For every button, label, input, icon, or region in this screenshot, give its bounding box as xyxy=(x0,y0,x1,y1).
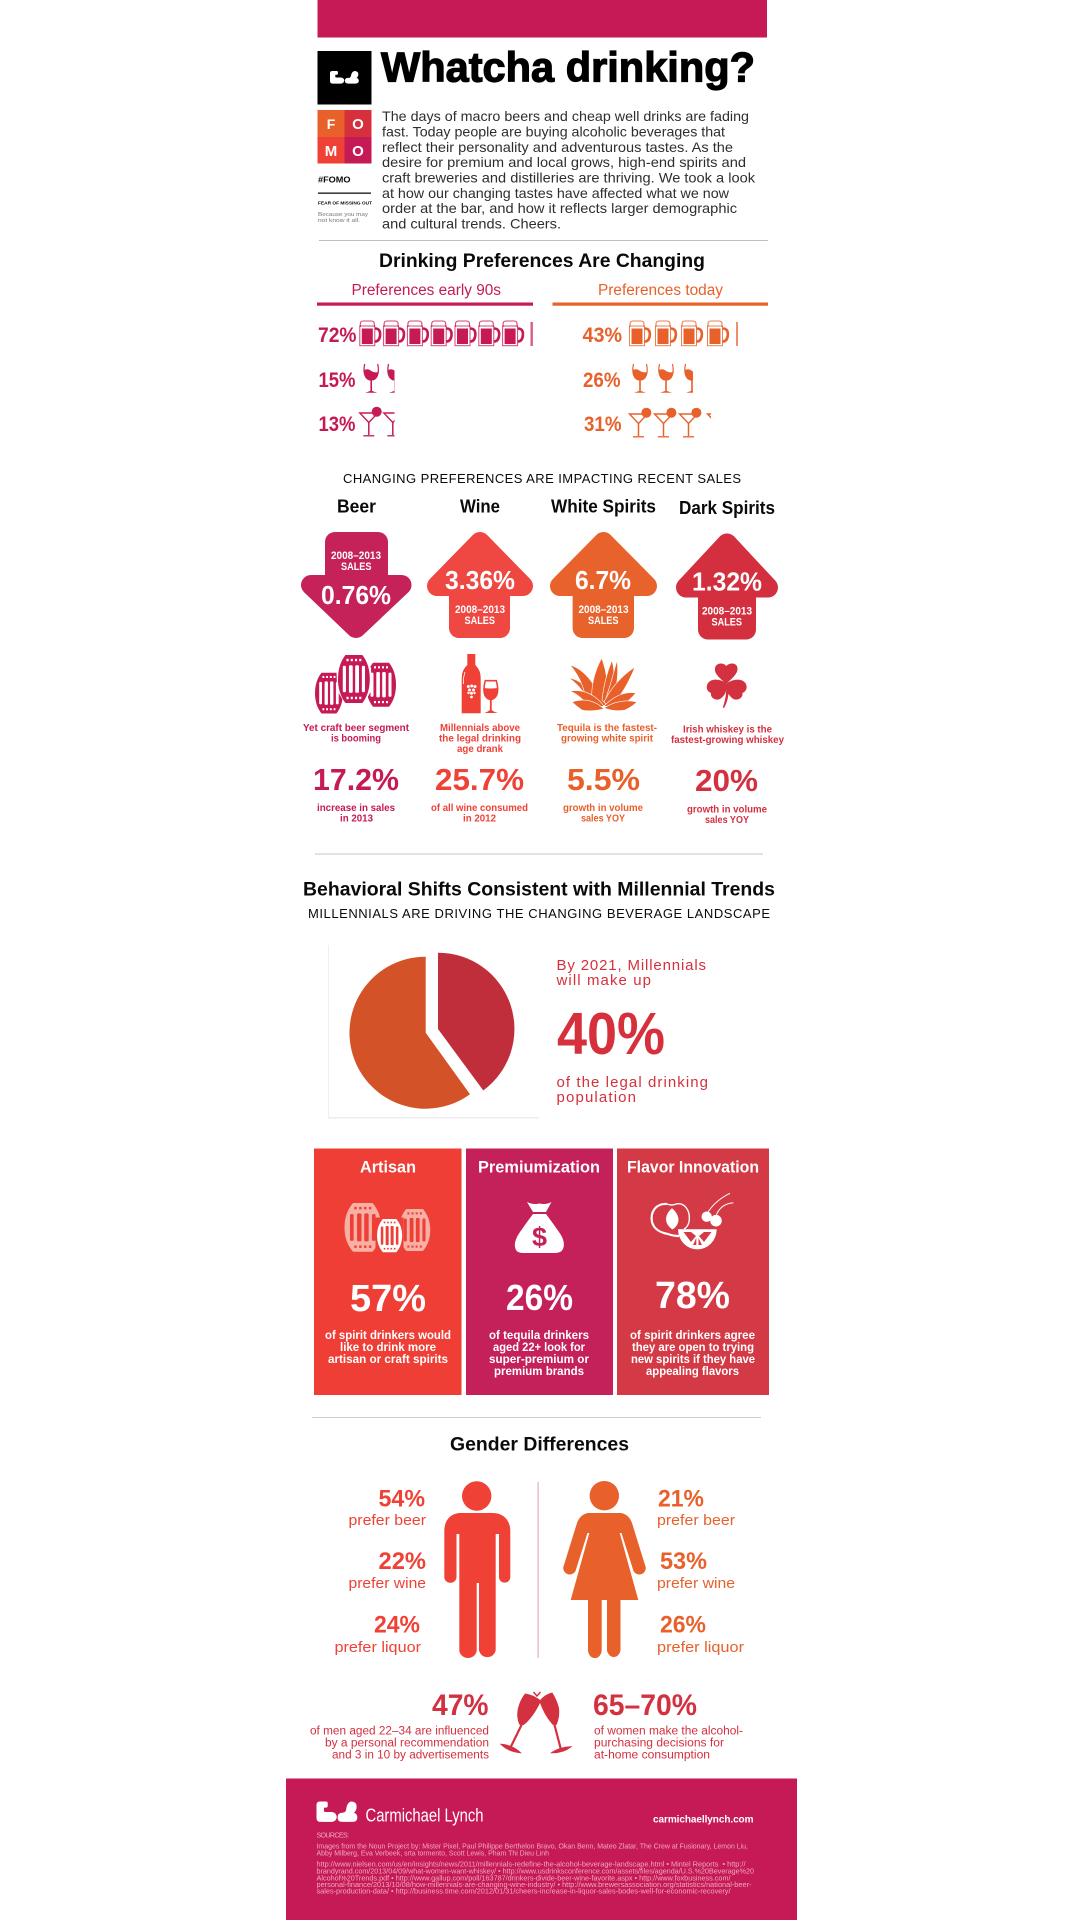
panel: artisan: artisan or craft spirits xyxy=(328,1352,448,1366)
panel: artisan xyxy=(314,1148,462,1395)
arrow: dark spirits up: SALES xyxy=(712,616,742,628)
stat label: increase in sales xyxy=(317,802,395,814)
panel: preferences early 90s: 13% xyxy=(318,413,356,436)
intro text: craft breweries and distilleries are thriving. We took a look xyxy=(382,170,756,186)
icon: money bag: $ xyxy=(532,1222,547,1252)
panel: flavor innovation: they are open to trying xyxy=(632,1340,754,1354)
arrow: beer down: SALES xyxy=(341,561,372,573)
arrow: beer down xyxy=(311,542,402,628)
arrow: dark spirits up: 2008–2013 xyxy=(702,606,752,618)
pie callout: will make up xyxy=(556,972,651,989)
FOMO caption xyxy=(318,176,372,224)
women stats: 21% xyxy=(658,1486,704,1512)
caption: Millennials above xyxy=(440,722,520,734)
women stats: prefer beer xyxy=(657,1512,735,1529)
footer xyxy=(286,1778,797,1920)
panel: preferences early 90s xyxy=(317,282,533,436)
intro text: fast. Today people are buying alcoholic beverages that xyxy=(382,124,725,140)
FOMO block: M xyxy=(325,143,337,160)
FOMO block: O xyxy=(352,143,364,160)
arrow: wine up: SALES xyxy=(464,615,495,627)
caption xyxy=(303,722,409,744)
stat label: sales YOY xyxy=(705,814,749,826)
FOMO caption: not know it all. xyxy=(318,218,360,224)
logo: Carmichael Lynch xyxy=(316,1802,484,1826)
callout: men influenced: by a personal recommendation xyxy=(325,1737,489,1749)
panel: premiumization: super-premium or xyxy=(489,1352,589,1366)
caption: Tequila is the fastest- xyxy=(557,722,657,734)
arrow: white spirits up: 6.7% xyxy=(575,565,631,595)
panel: premiumization: premium brands xyxy=(494,1364,584,1378)
panel: preferences today: 26% xyxy=(583,369,621,392)
icon: money bag xyxy=(515,1202,564,1253)
women stats: 53% xyxy=(660,1548,707,1575)
pie callout: of the legal drinking xyxy=(556,1074,708,1091)
caption: the legal drinking xyxy=(439,732,521,744)
pie callout: By 2021, Millennials xyxy=(556,957,706,974)
icon: wine bottle and glass xyxy=(462,654,498,713)
caption: is booming xyxy=(331,732,381,744)
sources: Alcohol%20Trends.pdf • http://www.gallup.com/poll/163787/drinkers-divide-beer-wine-favorite.aspx • http://www.foxbusiness.com/ xyxy=(316,1876,731,1882)
icon: agave xyxy=(569,658,637,711)
panel: preferences early 90s: Preferences early 90s xyxy=(352,282,501,299)
caption: growing white spirit xyxy=(561,732,653,744)
column: white spirits: White Spirits xyxy=(551,496,656,516)
panel: premiumization: 26% xyxy=(506,1277,573,1318)
subheading: recent sales: CHANGING PREFERENCES ARE IMPACTING RECENT SALES xyxy=(343,471,741,486)
panel: flavor innovation xyxy=(617,1148,769,1395)
men stats: 24% xyxy=(374,1612,420,1638)
panel: flavor innovation: appealing flavors xyxy=(646,1364,739,1378)
logo: black square xyxy=(318,51,372,104)
FOMO caption: Because you may xyxy=(318,212,368,218)
callout: men influenced: and 3 in 10 by advertisements xyxy=(332,1749,489,1761)
callout: men influenced: 47% xyxy=(432,1689,488,1722)
stat: 17.2% xyxy=(313,762,399,797)
icon: barrels xyxy=(344,1203,430,1254)
arrow: wine up: 2008–2013 xyxy=(455,604,505,616)
caption xyxy=(439,722,521,755)
arrow: wine up xyxy=(437,542,523,628)
pie callout: 40% xyxy=(557,1001,665,1067)
pie callout xyxy=(556,957,708,1106)
intro text: The days of macro beers and cheap well drinks are fading xyxy=(382,108,749,124)
intro text: reflect their personality and adventurous tastes. As the xyxy=(382,139,733,155)
panel: premiumization: Premiumization xyxy=(478,1158,600,1176)
stat label: of all wine consumed xyxy=(431,802,528,814)
caption: Irish whiskey is the xyxy=(683,724,772,736)
stat: 25.7% xyxy=(435,762,524,797)
sources xyxy=(316,1833,754,1896)
subheading: millennials: MILLENNIALS ARE DRIVING THE CHANGING BEVERAGE LANDSCAPE xyxy=(308,906,770,921)
column: wine xyxy=(431,496,528,824)
FOMO block xyxy=(318,110,372,164)
panel: premiumization: aged 22+ look for xyxy=(493,1340,585,1354)
caption: Yet craft beer segment xyxy=(303,722,409,734)
panel: flavor innovation: new spirits if they have xyxy=(631,1352,755,1366)
callout: women purchasing xyxy=(593,1689,743,1761)
women stats: prefer liquor xyxy=(657,1639,744,1656)
sources: brandyrand.com/2013/04/09/what-women-want-whiskey/ • http://www.usdrinksconference.com/assets/files/agenda/U.S.%20Beverage%20 xyxy=(316,1869,754,1876)
icon: man xyxy=(444,1481,510,1658)
stat label xyxy=(317,802,395,824)
stat: 5.5% xyxy=(567,762,640,797)
panel: artisan: Artisan xyxy=(360,1158,416,1176)
stat label: growth in volume xyxy=(687,804,767,816)
men stats: 22% xyxy=(378,1548,426,1575)
heading: gender differences: Gender Differences xyxy=(450,1434,629,1456)
stat label: in 2013 xyxy=(340,812,373,824)
sources: personal-finance/2013/10/08/how-millennials-are-changing-wine-industry/ • http://www.brewersassociation.org/statistics/national-beer- xyxy=(316,1882,752,1889)
top bar xyxy=(318,0,767,38)
intro text xyxy=(382,108,756,232)
panel: artisan: of spirit drinkers would xyxy=(325,1328,451,1342)
sources: http://www.nielsen.com/us/en/insights/news/2011/millennials-redefine-the-alcohol-beverage-landscape.html • Mintel Reports • http:// xyxy=(316,1862,746,1869)
FOMO block: O xyxy=(352,116,364,133)
men stats: prefer liquor xyxy=(334,1639,421,1656)
pie callout: population xyxy=(556,1089,636,1106)
sources: SOURCES: xyxy=(316,1833,349,1840)
stat label: in 2012 xyxy=(463,812,496,824)
logo: Carmichael Lynch: Carmichael Lynch xyxy=(366,1806,484,1826)
intro text: desire for premium and local grows, high-end spirits and xyxy=(382,154,746,170)
panel: preferences today xyxy=(552,282,768,437)
callout: women purchasing: of women make the alcohol- xyxy=(594,1725,743,1737)
FOMO block: F xyxy=(327,116,336,132)
intro text: and cultural trends. Cheers. xyxy=(382,216,561,232)
panel: artisan: 57% xyxy=(350,1278,426,1320)
callout: men influenced xyxy=(310,1689,489,1761)
caption: fastest-growing whiskey xyxy=(671,734,784,746)
men stats xyxy=(334,1486,426,1656)
panel: preferences today: 31% xyxy=(584,413,622,436)
callout: women purchasing: purchasing decisions for xyxy=(594,1737,724,1749)
stat label: sales YOY xyxy=(581,812,625,824)
FOMO caption: #FOMO xyxy=(318,176,350,184)
women stats: prefer wine xyxy=(657,1575,735,1592)
heading: drinking preferences: Drinking Preferences Are Changing xyxy=(379,250,705,272)
arrow: white spirits up: SALES xyxy=(588,615,618,627)
caption xyxy=(557,722,657,744)
heading: behavioral shifts: Behavioral Shifts Consistent with Millennial Trends xyxy=(303,878,775,900)
arrow: white spirits up: 2008–2013 xyxy=(578,604,628,616)
callout: women purchasing: at-home consumption xyxy=(594,1749,710,1761)
panel: flavor innovation: 78% xyxy=(655,1275,730,1317)
sources: Images from the Noun Project by: Mister Pixel, Paul Philippe Berthelon Bravo, Okan Benn, Mateo Zlatar, The Crew at Fusionary, Lemon Liu, xyxy=(316,1843,748,1850)
men stats: 54% xyxy=(378,1486,425,1512)
stat label xyxy=(687,804,767,826)
panel: flavor innovation: of spirit drinkers agree xyxy=(630,1328,755,1342)
women stats: 26% xyxy=(660,1612,706,1638)
FOMO caption: FEAR OF MISSING OUT xyxy=(318,200,372,206)
icon: woman xyxy=(563,1481,646,1658)
stat label: growth in volume xyxy=(563,802,643,814)
sources: Abby Milberg, Eva Verbeek, srta tormento, Scott Lewis, Pham Thi Dieu Linh xyxy=(316,1850,549,1857)
men stats: prefer beer xyxy=(348,1512,426,1529)
caption xyxy=(671,724,784,746)
column: beer xyxy=(303,496,409,824)
stat label xyxy=(431,802,528,824)
website: carmichaellynch.com xyxy=(653,1814,754,1826)
column: white spirits xyxy=(551,496,657,824)
pie chart xyxy=(328,945,539,1118)
panel: flavor innovation: Flavor Innovation xyxy=(627,1158,759,1176)
arrow: dark spirits up: 1.32% xyxy=(692,566,762,596)
intro text: at how our changing tastes have affected what we now xyxy=(382,185,730,201)
arrow: white spirits up xyxy=(560,542,647,628)
sources: sales-production-data/ • http://business.time.com/2012/01/31/cheers-increase-in-liquor-sales-bodes-well-for-economic-recovery/ xyxy=(316,1889,731,1896)
women stats xyxy=(657,1486,744,1656)
title: Whatcha drinking? xyxy=(381,44,755,90)
icon: toasting glasses xyxy=(501,1692,571,1753)
callout: women purchasing: 65–70% xyxy=(593,1689,697,1722)
icon: fruit xyxy=(652,1193,733,1249)
panel: preferences today: Preferences today xyxy=(598,282,723,299)
stat label xyxy=(563,802,643,824)
column: wine: Wine xyxy=(460,496,500,516)
panel: preferences early 90s: 72% xyxy=(318,324,357,347)
infographic canvas xyxy=(286,0,797,1920)
column: dark spirits xyxy=(671,498,784,826)
stat: 20% xyxy=(695,763,758,798)
panel: artisan: like to drink more xyxy=(340,1340,436,1354)
column: beer: Beer xyxy=(337,496,376,516)
intro text: order at the bar, and how it reflects larger demographic xyxy=(382,200,737,216)
caption: age drank xyxy=(457,743,503,755)
icon: shamrock xyxy=(707,664,747,708)
panel: premiumization xyxy=(466,1148,613,1395)
arrow: beer down: 0.76% xyxy=(321,580,391,610)
arrow: wine up: 3.36% xyxy=(445,565,515,595)
panel: premiumization: of tequila drinkers xyxy=(489,1328,589,1342)
arrow: dark spirits up xyxy=(686,544,768,630)
icon: barrels xyxy=(315,654,396,714)
column: dark spirits: Dark Spirits xyxy=(679,498,775,518)
men stats: prefer wine xyxy=(348,1575,426,1592)
arrow: beer down: 2008–2013 xyxy=(331,550,381,562)
panel: preferences today: 43% xyxy=(582,324,622,347)
callout: men influenced: of men aged 22–34 are influenced xyxy=(310,1725,489,1737)
panel: preferences early 90s: 15% xyxy=(318,369,356,392)
